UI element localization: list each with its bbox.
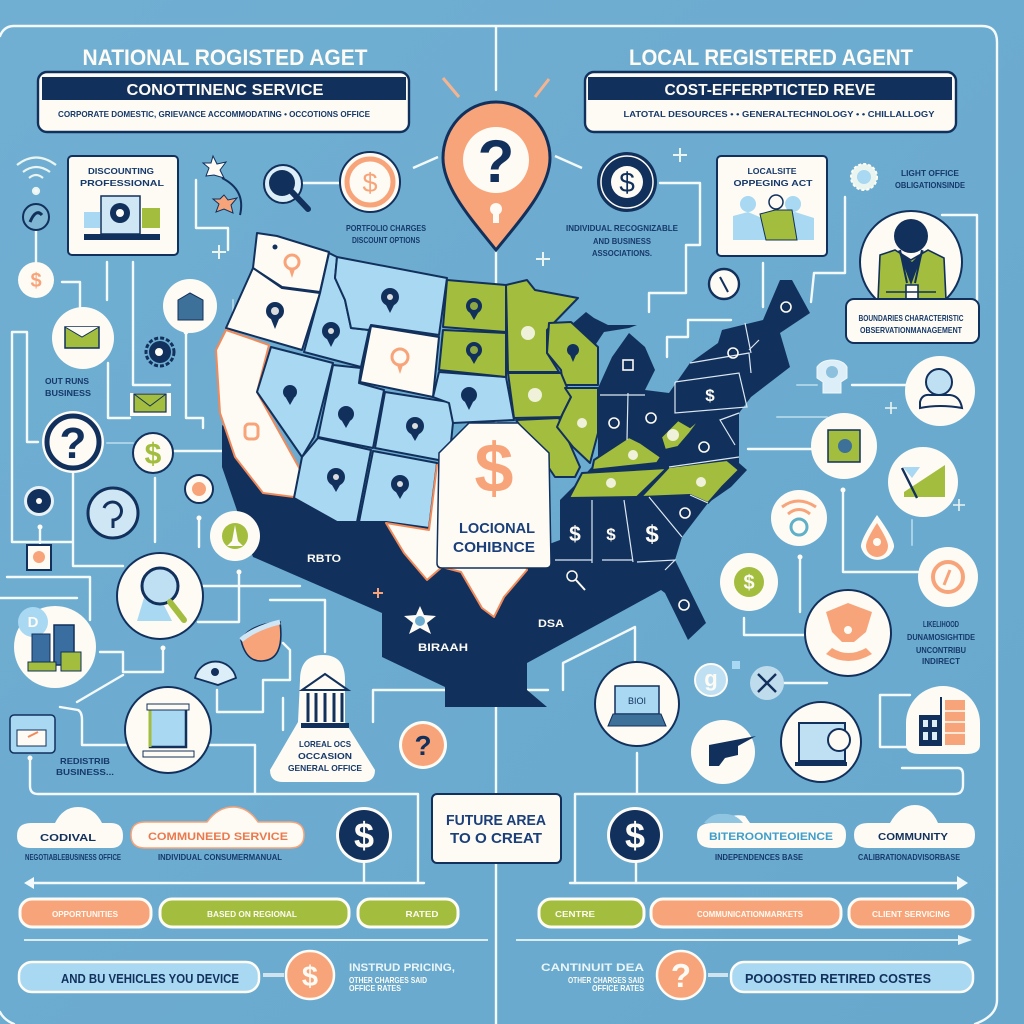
divider arrows	[24, 935, 972, 945]
future area box	[432, 794, 561, 863]
icon: navy dollar top right: $	[619, 167, 635, 198]
note: continuity area	[541, 962, 644, 993]
icon: orange dollar coin	[18, 262, 54, 298]
caption: small card	[56, 756, 114, 777]
icon: green dollar circle: $	[743, 572, 755, 594]
icon: green dollar: $	[145, 438, 162, 471]
icon: orange face circle	[805, 590, 891, 676]
card: discounting professional: DISCOUNTING	[88, 166, 154, 176]
label: community	[854, 805, 975, 862]
icon: compass	[709, 269, 739, 299]
east state borders	[555, 323, 759, 570]
icon: laptop circle: BIOI	[628, 696, 646, 706]
panel: local service banner: COST-EFFERPTICTED REVE	[664, 82, 876, 99]
price tag: locational convenience: $	[475, 429, 513, 507]
connector: bottom right	[708, 973, 728, 977]
icon: agent portrait with caption	[846, 211, 979, 343]
icon: plus	[885, 402, 965, 511]
icon: orange dollar bottom	[286, 951, 334, 999]
icon: navy dollar left	[336, 807, 392, 863]
icon: agent portrait with caption: OBSERVATIONMANAGEMENT	[860, 325, 963, 335]
map pins: $	[705, 386, 715, 405]
bottom left pill	[19, 962, 259, 992]
icon: agent portrait with caption: BOUNDARIES CHARACTERISTIC	[858, 313, 964, 323]
caption: small card: BUSINESS...	[56, 767, 114, 777]
icon: small globe	[23, 204, 49, 230]
caption: national coin: DISCOUNT OPTIONS	[352, 235, 420, 245]
pills: local features: COMMUNICATIONMARKETS	[697, 909, 803, 919]
icon: navy token	[24, 486, 54, 516]
icon: building cylinder	[163, 279, 217, 333]
icon: calculator circle	[906, 686, 980, 754]
pills: national features: BASED ON REGIONAL	[207, 909, 297, 919]
pills: national features	[20, 899, 458, 927]
pills: local features: CENTRE	[555, 909, 595, 919]
caption: navy dollar: INDIVIDUAL RECOGNIZABLE	[566, 223, 678, 233]
icon: orange half globe	[241, 622, 281, 661]
label: codival: CODIVAL	[40, 833, 96, 844]
icon: orange drop	[861, 515, 894, 560]
caption: out runs: OUT RUNS	[45, 376, 89, 386]
caption: out runs: BUSINESS	[45, 388, 91, 398]
caption: national coin: PORTFOLIO CHARGES	[346, 223, 426, 233]
icon: question circle: ?	[60, 419, 86, 468]
caption: small card: REDISTRIB	[60, 756, 110, 766]
icon: laptop circle	[595, 662, 679, 746]
panel: national service banner	[38, 72, 409, 132]
right title: LOCAL REGISTERED AGENT	[629, 45, 914, 70]
icon: small certificate	[27, 545, 51, 570]
icon: map tool circle	[888, 447, 958, 517]
map pins	[245, 244, 791, 610]
map	[216, 233, 810, 707]
icon: helmet circle	[905, 356, 975, 426]
icon: magnifier	[264, 165, 308, 209]
bottom left pill: AND BU VEHICLES YOU DEVICE	[61, 971, 239, 986]
label: community: COMMUNITY	[878, 832, 948, 843]
pills: local features: CLIENT SERVICING	[872, 909, 950, 919]
map pins: $	[645, 521, 659, 548]
icon: wifi circle	[771, 490, 827, 546]
pills: local features	[539, 899, 973, 927]
icon: cross token	[750, 666, 784, 700]
arrow: local direction	[570, 876, 968, 890]
label: codival: NEGOTIABLEBUSINESS OFFICE	[25, 852, 121, 862]
pin rays	[443, 78, 549, 97]
icon: laptop magnifier circle	[781, 702, 861, 782]
card: local operating act: OPPEGING ACT	[734, 178, 813, 188]
label: intercontinence: INDEPENDENCES BASE	[715, 852, 803, 862]
icon: green mail	[130, 393, 171, 416]
icon: sun gear	[851, 164, 877, 190]
caption: orange face: DUNAMOSIGHTIDE	[907, 632, 975, 642]
price tag: locational convenience	[437, 423, 551, 568]
caption: national coin	[346, 223, 426, 245]
caption: sun gear	[895, 168, 965, 190]
icon: blue question ring	[88, 488, 138, 538]
map pins: $	[606, 525, 616, 544]
price tag: locational convenience: COHIBNCE	[453, 539, 535, 556]
note: continuity area: CANTINUIT DEA	[541, 962, 644, 974]
connector lines	[0, 180, 977, 883]
icon: orange question bottom	[657, 951, 705, 999]
label: intercontinence	[697, 814, 846, 862]
bottom right pill: POOOSTED RETIRED COSTES	[745, 971, 931, 986]
icon: brain chip	[817, 360, 847, 393]
caption: orange face: LIKELIHOOD	[923, 619, 959, 629]
icon: pointing hand circle	[691, 720, 756, 784]
caption: out runs	[45, 376, 91, 398]
note: instruct pricing	[349, 962, 455, 993]
icon: plus	[212, 245, 226, 259]
map region labels: BIRAAH	[418, 642, 468, 654]
future area box: FUTURE AREA	[446, 812, 546, 829]
map pins: $	[569, 523, 581, 546]
icon: large magnifier	[117, 553, 203, 639]
bottom right pill	[731, 962, 973, 992]
map region labels	[307, 553, 564, 654]
panel: local service banner: LATOTAL DESOURCES • • GENERALTECHNOLOGY • • CHILLALLOGY	[624, 109, 935, 119]
icon: small orange token	[185, 475, 213, 503]
label: communed service: INDIVIDUAL CONSUMERMANUAL	[158, 852, 282, 862]
caption: orange face: INDIRECT	[922, 656, 961, 666]
note: instruct pricing: OTHER CHARGES SAID	[349, 975, 427, 985]
card: discounting professional: PROFESSIONAL	[80, 178, 164, 188]
icon: gear	[146, 338, 174, 366]
icon: city buildings: D	[28, 614, 39, 631]
icon: plus signs	[536, 148, 687, 266]
icon: green dollar circle	[720, 553, 778, 611]
card: local operating act: LOCALSITE	[748, 166, 797, 176]
caption: navy dollar: AND BUSINESS	[593, 236, 651, 246]
icon: orange question	[399, 721, 447, 769]
card: local operating act	[717, 156, 827, 256]
note: continuity area: OFFICE RATES	[592, 983, 644, 993]
icon: letter g token	[695, 661, 740, 696]
pills: national features: OPPORTUNITIES	[52, 909, 118, 919]
note: continuity area: OTHER CHARGES SAID	[568, 975, 644, 985]
star and search marker	[373, 571, 585, 634]
central question pin: ?	[478, 128, 514, 195]
central question pin	[443, 102, 550, 250]
icon: gauge	[195, 662, 236, 685]
label: communed service: COMMUNEED SERVICE	[148, 831, 288, 843]
caption: sun gear: OBLIGATIONSINDE	[895, 180, 965, 190]
icon: small card	[10, 715, 55, 753]
panel: local service banner	[585, 72, 956, 132]
icon: dollar coin orange ring	[340, 152, 400, 212]
icon: navy dollar right: $	[625, 815, 645, 856]
card: discounting professional	[68, 156, 178, 255]
caption: navy dollar	[566, 223, 678, 258]
panel: national service banner: CONOTTINENC SERVICE	[126, 82, 324, 99]
icon: wifi	[17, 158, 56, 194]
price tag: locational convenience: LOCIONAL	[459, 520, 535, 537]
icon: orange coin	[918, 547, 978, 607]
caption: orange face: UNCONTRIBU	[916, 645, 966, 655]
icon: orange dollar bottom: $	[302, 961, 318, 993]
western states	[216, 233, 527, 617]
arrow: national direction	[24, 877, 424, 889]
left title: NATIONAL ROGISTED AGET	[82, 45, 368, 70]
icon: city buildings	[14, 606, 96, 688]
label: intercontinence: BITEROONTEOIENCE	[709, 831, 833, 843]
connector: bottom left	[263, 973, 284, 977]
icon: orange question: ?	[414, 730, 432, 761]
panel: national service banner: CORPORATE DOMESTIC, GRIEVANCE ACCOMMODATING • OCCOTIONS OFFICE	[58, 109, 370, 119]
icon: orange question bottom: ?	[671, 957, 691, 994]
icon: rocket circle	[210, 511, 260, 561]
icon: envelope circle	[52, 307, 114, 369]
icon: green dollar	[133, 433, 173, 473]
icon: navy dollar left: $	[354, 815, 374, 856]
midwest and green states	[439, 280, 739, 503]
icon: stars and arc	[203, 156, 241, 215]
icon: question circle	[42, 411, 104, 473]
future area box: TO O CREAT	[450, 830, 542, 847]
upper michigan	[571, 312, 637, 347]
icon: column monument	[125, 687, 211, 773]
icon: navy dollar right	[607, 807, 663, 863]
icon: bank with caption	[270, 655, 375, 782]
icon: bank with caption: GENERAL OFFICE	[288, 763, 362, 773]
icon: dollar coin orange ring: $	[362, 168, 378, 198]
pills: national features: RATED	[406, 909, 438, 919]
icon: bank with caption: LOREAL OCS	[299, 739, 351, 749]
map region labels: RBTO	[307, 553, 341, 565]
caption: orange face	[907, 619, 975, 666]
note: instruct pricing: INSTRUD PRICING,	[349, 962, 455, 974]
dark map base	[222, 280, 810, 707]
icon: orange dollar coin: $	[30, 270, 42, 292]
label: communed service	[131, 807, 304, 862]
map region labels: DSA	[538, 618, 564, 630]
icon: letter g token: g	[704, 666, 718, 691]
caption: navy dollar: ASSOCIATIONS.	[592, 248, 652, 258]
label: codival	[17, 807, 123, 862]
icon: navy dollar top right	[597, 152, 657, 212]
icon: green badge circle	[811, 413, 877, 479]
icon: bank with caption: OCCASION	[298, 751, 352, 761]
caption: sun gear: LIGHT OFFICE	[901, 168, 959, 178]
note: instruct pricing: OFFICE RATES	[349, 983, 401, 993]
label: community: CALIBRATIONADVISORBASE	[858, 852, 960, 862]
